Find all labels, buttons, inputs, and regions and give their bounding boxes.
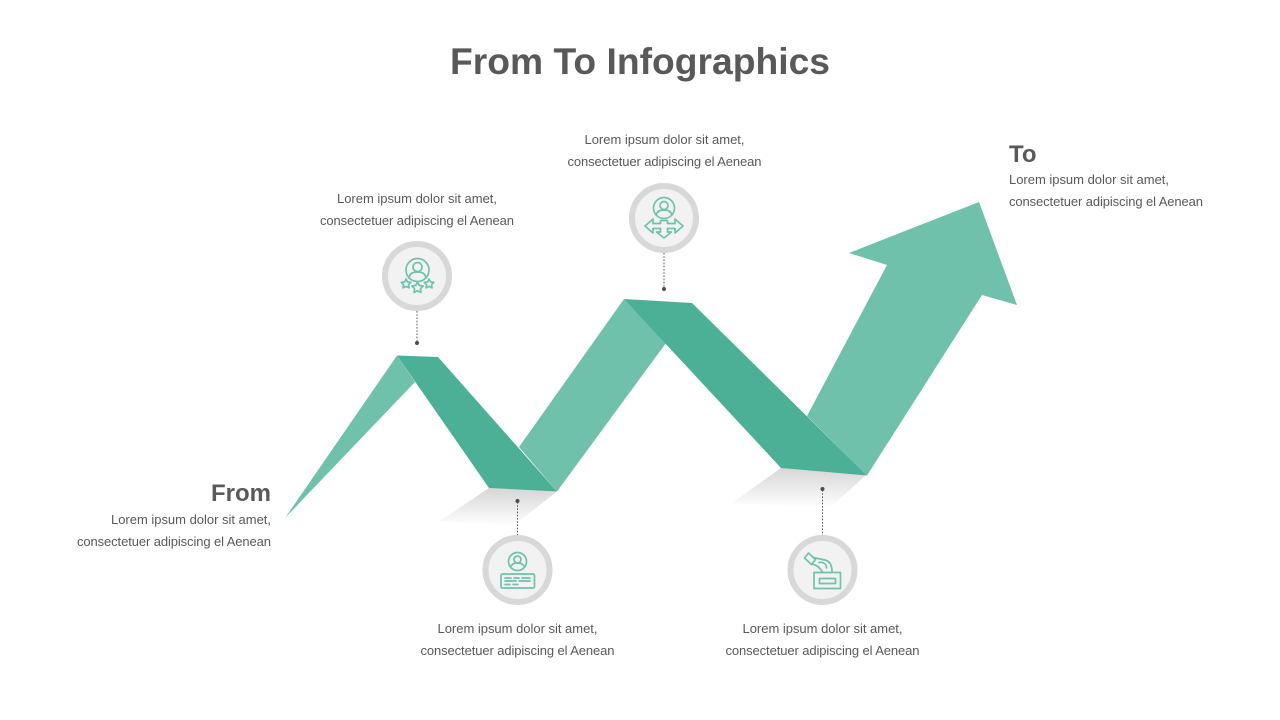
step 4: hand and ballot [726, 487, 920, 658]
text block: Lorem ipsum dolor sit amet, [584, 132, 744, 147]
title: From To Infographics [450, 41, 830, 82]
heading: To: To [1009, 141, 1037, 168]
zigzag arrow [285, 202, 1017, 526]
segment: second rise [519, 299, 666, 492]
connector dot [820, 487, 824, 491]
step 1: achievement [320, 191, 514, 345]
label: To [1009, 141, 1203, 209]
icon ring [790, 538, 854, 602]
text block: To: Lorem ipsum dolor sit amet, [1009, 172, 1169, 187]
text block: consectetuer adipiscing el Aenean [420, 643, 614, 658]
icon ring [486, 538, 550, 602]
icon: person with stars [401, 258, 434, 292]
step 2: directions [568, 132, 762, 291]
shadow: first fold [440, 488, 557, 526]
connector [822, 490, 824, 535]
text block: From: consectetuer adipiscing el Aenean [77, 534, 271, 549]
text block: Lorem ipsum dolor sit amet, [742, 621, 902, 636]
connector dot [516, 499, 520, 503]
connector [516, 502, 518, 535]
segment: first fall [397, 356, 557, 492]
segment: second fall [624, 299, 867, 476]
text block: consectetuer adipiscing el Aenean [320, 213, 514, 228]
text block: Lorem ipsum dolor sit amet, [337, 191, 497, 206]
icon: person and keyboard [501, 552, 534, 588]
icon ring [385, 244, 449, 308]
connector dot [415, 341, 419, 345]
segment: tail [285, 356, 415, 518]
icon: hand and ballot box [804, 553, 840, 588]
connector [663, 253, 665, 288]
text block: consectetuer adipiscing el Aenean [726, 643, 920, 658]
heading: From: From [211, 480, 271, 507]
connector [416, 311, 418, 342]
segment: arrow head and shaft [807, 202, 1017, 476]
text block: consectetuer adipiscing el Aenean [568, 154, 762, 169]
shadow: second fold [732, 468, 866, 508]
icon: person with arrows [645, 198, 683, 238]
connector dot [662, 287, 666, 291]
step 3: person with keyboard [420, 499, 614, 658]
text block: Lorem ipsum dolor sit amet, [438, 621, 598, 636]
text block: To: consectetuer adipiscing el Aenean [1009, 194, 1203, 209]
icon ring [632, 186, 696, 250]
text block: From: Lorem ipsum dolor sit amet, [111, 512, 271, 527]
label: From [77, 480, 271, 549]
